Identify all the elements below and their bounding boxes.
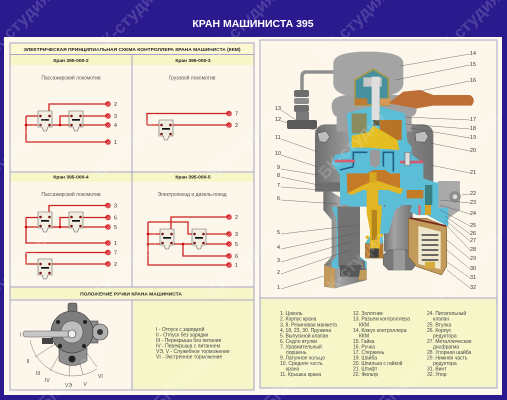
- callout numbers and leader lines: 19: [470, 135, 476, 141]
- parts column 2: 12. Золотник: [353, 311, 384, 317]
- parts column 1: 5. Выпускной клапан: [280, 332, 328, 339]
- callout numbers and leader lines: 16: [470, 78, 476, 84]
- sub headings row 2: [10, 172, 254, 182]
- positions heading: ПОЛОЖЕНИЕ РУЧКИ КРАНА МАШИНИСТА: [80, 292, 182, 298]
- callout numbers and leader lines: 29: [470, 256, 476, 262]
- parts column 2: 16. Ручка: [353, 344, 375, 350]
- panel: parts list: [260, 298, 497, 388]
- callout numbers and leader lines: [275, 51, 476, 291]
- callout numbers and leader lines: 13: [275, 106, 281, 112]
- parts column 2: 19. Шайба: [353, 354, 377, 362]
- handle diagram: V: [84, 382, 88, 388]
- parts column 3: диафрагма: [433, 344, 459, 350]
- parts column 2: 14. Кожух контроллера: [353, 328, 407, 334]
- callout numbers and leader lines: 17: [470, 117, 476, 123]
- legend of handle positions: VЭ, V - Служебное торможение: [156, 349, 230, 355]
- callout numbers and leader lines: 14: [470, 51, 476, 57]
- sub headings row 2: Кран 395-000-4: [53, 174, 89, 180]
- sub headings row 2: Кран 395-000-5: [175, 174, 211, 180]
- callout numbers and leader lines: 1: [277, 285, 280, 291]
- callout numbers and leader lines: 26: [470, 231, 476, 237]
- parts column 1: 11. Крышка крана: [280, 372, 321, 378]
- handle diagram: II: [26, 359, 29, 365]
- parts column 2: ККМ: [359, 333, 369, 339]
- legend of handle positions: IV - Перекрыша с питанием: [156, 344, 221, 350]
- circuit: passenger locomotive 395-000-4: 3: [114, 204, 117, 210]
- callout numbers and leader lines: 3: [277, 258, 280, 264]
- sub headings row 1: Кран 395-000-3: [175, 58, 211, 64]
- callout numbers and leader lines: 25: [470, 223, 476, 229]
- handle diagram: IV: [45, 378, 50, 384]
- callout numbers and leader lines: 8: [277, 173, 280, 179]
- callout numbers and leader lines: 6: [277, 196, 280, 202]
- parts column 3: редуктора: [433, 333, 457, 339]
- handle diagram: VЭ: [65, 383, 72, 389]
- handle diagram: VI: [98, 374, 103, 380]
- callout numbers and leader lines: 7: [277, 183, 280, 189]
- parts column 2: 21. Штифт: [353, 366, 378, 372]
- circuit: freight locomotive 395-000-3: Грузовой локомотив: [169, 74, 216, 82]
- parts column 1: 6. Седло втулки: [280, 339, 317, 345]
- circuit: passenger locomotive 395-000-2: 4: [114, 123, 117, 129]
- parts column 1: 9. Латунное кольцо: [280, 356, 325, 362]
- title: КРАН МАШИНИСТА 395: [192, 18, 314, 30]
- callout numbers and leader lines: 11: [275, 135, 281, 141]
- circuit: passenger locomotive 395-000-4: 7: [114, 250, 117, 256]
- circuit: freight locomotive 395-000-3: 7: [235, 112, 238, 118]
- callout numbers and leader lines: 15: [470, 62, 476, 68]
- circuit: freight locomotive 395-000-3: 2: [235, 123, 238, 129]
- circuit: passenger locomotive 395-000-2: Пассажирский локомотив: [41, 74, 101, 82]
- watermark: БК-студия: [89, 228, 164, 303]
- legend of handle positions: II - Отпуск без зарядки: [156, 332, 208, 338]
- parts column 2: 17. Стержень: [353, 350, 385, 356]
- callout numbers and leader lines: 27: [470, 238, 476, 244]
- parts column 2: 15. Гайка: [353, 338, 375, 345]
- callout numbers and leader lines: 31: [470, 275, 476, 281]
- circuit: electric train and diesel train 395-000-5: 2: [235, 215, 238, 221]
- parts column 3: клапан: [433, 317, 449, 323]
- parts column 2: ККМ: [359, 322, 369, 328]
- lower body: [323, 187, 460, 288]
- callout numbers and leader lines: 10: [275, 151, 281, 157]
- callout numbers and leader lines: 20: [470, 148, 476, 154]
- parts column 2: [353, 311, 410, 378]
- side pipe and connector: [287, 72, 334, 129]
- parts column 1: 7. Уравнительный: [280, 343, 322, 350]
- parts column 2: 20. Шпилька с гайкой: [353, 360, 403, 367]
- parts column 3: редуктора: [433, 361, 457, 367]
- circuit: passenger locomotive 395-000-4: 1: [114, 241, 117, 247]
- circuit: electric train and diesel train 395-000-5: Электропоезд и дизель-поезд: [157, 192, 227, 198]
- callout numbers and leader lines: 32: [470, 285, 476, 291]
- legend of handle positions: [156, 326, 230, 360]
- parts column 3: 26. Корпус: [427, 328, 452, 334]
- scheme heading: [10, 44, 254, 54]
- circuit: passenger locomotive 395-000-4: 5: [114, 225, 117, 231]
- parts column 3: 27. Металлическая: [427, 339, 472, 345]
- parts column 1: 2. Корпус крана: [280, 317, 317, 323]
- parts column 1: 10. Средняя часть: [280, 361, 323, 367]
- circuit: passenger locomotive 395-000-4: 2: [114, 262, 117, 268]
- handle diagram: I: [20, 332, 21, 338]
- parts column 3: 28. Упорная шайба: [427, 349, 472, 356]
- legend of handle positions: III - Перекрыша без питания: [156, 338, 222, 344]
- callout numbers and leader lines: 4: [277, 245, 280, 251]
- watermark: БК-студия: [314, 228, 389, 303]
- circuit: passenger locomotive 395-000-2: 2: [114, 102, 117, 108]
- circuit: passenger locomotive 395-000-4: [25, 191, 117, 279]
- scheme heading: ЭЛЕКТРИЧЕСКАЯ ПРИНЦИПИАЛЬНАЯ СХЕМА КОНТРОЛЛЕРА КРАНА МАШИНИСТА (ККМ): [24, 47, 241, 53]
- parts column 1: крана: [286, 366, 300, 372]
- watermark: БК-студия: [429, 228, 504, 303]
- circuit: electric train and diesel train 395-000-5: 1: [235, 263, 238, 269]
- callout numbers and leader lines: 30: [470, 266, 476, 272]
- callout numbers and leader lines: 5: [277, 230, 280, 236]
- circuit: passenger locomotive 395-000-2: 1: [114, 140, 117, 146]
- callout numbers and leader lines: 22: [470, 191, 476, 197]
- panel: electrical schemes: [10, 43, 254, 287]
- cap: [333, 52, 403, 120]
- circuit: electric train and diesel train 395-000-5: [147, 192, 238, 269]
- handle diagram: [20, 303, 108, 389]
- watermark: БК-студия: [429, 108, 504, 183]
- circuit: electric train and diesel train 395-000-5: 5: [235, 242, 238, 248]
- parts column 3: 24. Питательный: [427, 310, 466, 317]
- valve cross-section: [287, 52, 474, 288]
- watermark: БК-студия: [204, 228, 279, 303]
- parts column 1: [280, 311, 337, 378]
- panel: handle positions: [10, 287, 254, 390]
- circuit: passenger locomotive 395-000-4: Пассажирский локомотив: [41, 191, 101, 198]
- parts column 1: поршень: [286, 350, 307, 356]
- circuit: passenger locomotive 395-000-4: 6: [114, 216, 117, 222]
- parts column 2: 13. Разъем контроллера: [353, 317, 410, 323]
- parts column 1: 3, 8. Резиновая манжета: [280, 322, 337, 328]
- circuit: passenger locomotive 395-000-2: 3: [114, 114, 117, 120]
- callout numbers and leader lines: 9: [277, 165, 280, 171]
- circuit: electric train and diesel train 395-000-5: 6: [235, 254, 238, 260]
- parts column 3: [427, 310, 472, 378]
- parts column 3: 32. Упор: [427, 372, 447, 378]
- circuit: passenger locomotive 395-000-2: [25, 74, 117, 146]
- sub headings row 1: [10, 55, 254, 65]
- parts column 3: 25. Втулка: [427, 322, 451, 328]
- circuit: electric train and diesel train 395-000-5: 3: [235, 232, 238, 238]
- legend of handle positions: I - Отпуск с зарядкой: [156, 326, 205, 333]
- parts column 3: 29. Нижняя часть: [427, 356, 468, 362]
- callout numbers and leader lines: 18: [470, 126, 476, 132]
- handle diagram: III: [36, 371, 40, 377]
- legend of handle positions: VI - Экстренное торможение: [156, 354, 222, 360]
- callout numbers and leader lines: 24: [470, 211, 476, 217]
- sub headings row 1: Кран 395-000-2: [53, 58, 89, 64]
- parts column 3: 31. Винт: [427, 366, 447, 372]
- panel: valve drawing: [260, 40, 497, 298]
- circuit: freight locomotive 395-000-3: [147, 74, 238, 140]
- watermark: БК-студия: [204, 108, 279, 183]
- callout numbers and leader lines: 2: [277, 270, 280, 276]
- upper body: [315, 95, 461, 208]
- handle: [388, 90, 474, 108]
- watermark: БК-студия: [89, 108, 164, 183]
- callout numbers and leader lines: 21: [470, 170, 476, 176]
- parts column 1: 4, 18, 23, 30. Пружина: [280, 328, 331, 334]
- callout numbers and leader lines: 28: [470, 247, 476, 253]
- callout numbers and leader lines: 12: [275, 117, 281, 123]
- parts column 2: 22. Фильтр: [353, 372, 378, 378]
- parts column 1: 1. Цоколь: [280, 311, 303, 317]
- watermark: БК-студия: [314, 108, 389, 183]
- callout numbers and leader lines: 23: [470, 200, 476, 206]
